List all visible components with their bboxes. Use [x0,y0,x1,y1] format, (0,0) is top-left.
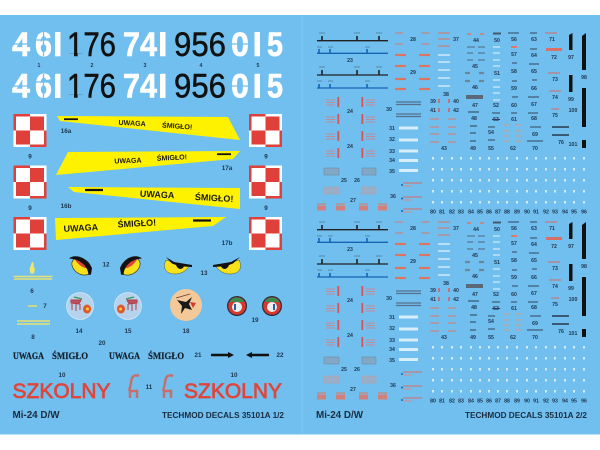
rotor stripes 23 [317,33,388,88]
arrows 21, 22: 22 [276,352,284,359]
items 44-49 [465,34,485,152]
yellow strip 17a: 17a [222,165,233,172]
serif stencils 20: UWAGA ŚMIGŁO: 20 [98,340,106,347]
yellow strip 16b: UWAGA [140,189,175,200]
number labels 80-96 lower: 81 [439,398,445,404]
items 63-70 lower: 67 [531,291,537,297]
items 56-62: 60 [511,103,517,109]
number labels 80-96 lower: 82 [449,398,455,404]
items 56-62 [504,33,521,152]
items 56-62: 56 [511,37,517,43]
number labels 80-96: 80 [430,210,436,216]
yellow strip 17b: ŚMIGŁO! [117,217,156,230]
items 56-62: 62 [510,146,516,152]
tactical numbers row 1: 1 [248,26,266,64]
items 44-49: 44 [473,38,479,44]
number labels 80-96: 89 [514,210,520,216]
items 71-76 lower: 73 [552,266,558,272]
items 39-43 lower [430,288,459,341]
items 6, 7, 8: small yellow stencils: 8 [31,334,35,341]
number labels 80-96 lower: 85 [477,398,483,404]
items 63-70 lower: 69 [532,321,538,327]
tactical numbers row 2: 5 [267,68,283,106]
items 63-70 lower: 63 [531,226,537,232]
items 50-55 lower: 55 [488,335,494,341]
footer title right sheet: Mi-24 D/W [316,410,364,421]
items 30-36 lower: 34 [389,347,395,353]
items 71-76 lower: 71 [549,226,555,232]
roundels: Polish checkerboard: 9 [264,205,268,212]
eyes 13: 13 [200,270,208,277]
items 63-70 lower: 65 [531,258,537,264]
black bars 97-101: 98 [581,75,587,81]
rotor stripes 23: 23 [347,58,353,64]
tactical numbers row 2 [12,74,282,98]
number labels 80-96: 84 [468,210,474,216]
items 71-76 [545,33,569,146]
tactical numbers row 2: 176 [67,68,116,106]
items 71-76 lower: 74 [552,284,558,290]
number labels 80-96 lower: 94 [562,398,568,404]
grey grids 25, 26 and pale red grids 27 lower: 27 [350,387,356,393]
serif stencils 20: UWAGA ŚMIGŁO: ŚMIGŁO [52,350,88,362]
arrows 21, 22: 21 [194,352,202,359]
items 56-62: 57 [511,52,517,58]
items 30-36 lower: 30 [386,296,392,302]
items 50-55 [488,34,501,152]
number labels 1-5: 2 [91,63,94,69]
items 63-70 lower: 64 [531,242,537,248]
badge 18: 18 [182,328,190,335]
items 39-43: 43 [441,146,447,152]
tactical numbers row 2: 1 [48,68,67,106]
number labels 1-5: 1 [38,63,41,69]
items 50-55: 51 [494,71,500,77]
tactical numbers row 1: 0 [231,26,249,64]
number labels 1-5: 3 [144,63,147,69]
hook markings 11 [129,375,173,398]
roundels: Polish checkerboard [14,114,282,250]
tactical numbers row 2: 74 [123,68,157,106]
items 44-49 lower: 44 [473,227,479,233]
items 71-76: 76 [558,140,564,146]
red dashes 28, 29 lower: 29 [410,259,416,265]
number labels 80-96: 85 [477,210,483,216]
tactical numbers row 2: 6 [35,68,52,106]
grey grids 25, 26 and pale red grids 27 lower: 26 [354,367,360,373]
tactical numbers row 1 [12,32,282,56]
items 50-55: 55 [488,146,494,152]
items 63-70: 67 [531,102,537,108]
items 44-49: 46 [472,85,478,91]
SZKOLNY markings 10 [12,372,282,403]
items 44-49 lower: 49 [470,335,476,341]
number labels 80-96: 87 [495,210,501,216]
number labels 80-96: 90 [524,210,530,216]
items 63-70: 69 [532,132,538,138]
white small numerals grid lower [433,346,584,392]
yellow strip 17b: UWAGA [63,222,99,234]
number labels 80-96: 92 [543,210,549,216]
items 30-36 lower: 35 [389,358,395,364]
items 30-36: 30 [386,107,392,113]
items 56-62: 61 [511,117,517,123]
number labels 80-96 lower: 90 [524,398,530,404]
items 63-70: 70 [532,146,538,152]
red markers 24: 24 [347,109,353,115]
items 30-36: 34 [389,158,395,164]
items 50-55 lower: 52 [493,292,499,298]
eyes 12: 12 [102,262,110,268]
number labels 80-96 lower: 88 [504,398,510,404]
items 50-55 lower [488,222,501,341]
yellow strip 16a: UWAGA [118,119,146,128]
items 30-36 lower: 32 [389,326,395,332]
items 30-36 lower: 31 [389,315,395,321]
number labels 1-5 [38,63,260,69]
tactical numbers row 1: 1 [153,26,172,64]
items 71-76: 73 [552,77,558,83]
red dashes 28, 29: 37 [453,37,459,43]
badge 15: 15 [124,328,132,335]
number labels 80-96 lower: 84 [468,398,474,404]
red dashes 28, 29 lower: 28 [410,226,416,232]
yellow strip 17a: UWAGA [114,157,142,165]
number labels 80-96 lower: 95 [571,398,577,404]
badges 19: 19 [251,317,259,324]
tactical numbers row 2: 4 [12,68,30,106]
items 56-62: 58 [511,69,517,75]
items 71-76 lower [545,222,569,335]
items 63-70: 66 [531,86,537,92]
tactical numbers row 2: 1 [153,68,172,106]
items 63-70: 65 [531,69,537,75]
white small numerals grid [433,157,584,204]
items 30-36: 35 [389,169,395,175]
yellow strip 17a: ŚMIGŁO! [156,152,187,163]
grey grids 25, 26 and pale red grids 27 lower [317,357,387,397]
items 6, 7, 8: small yellow stencils: 6 [30,288,34,295]
grey grids 25, 26 and pale red grids 27: 27 [350,198,356,204]
black bars 97-101 lower [568,222,587,337]
yellow strip 16a [57,116,240,140]
items 39-43: 39 [430,99,436,105]
yellow strip 16b: 16b [61,203,72,210]
red markers 24 lower: 24 [347,298,353,304]
items 50-55 lower: 54 [488,319,494,325]
number labels 80-96: 86 [486,210,492,216]
items 63-70: 68 [531,116,537,122]
number labels 80-96 lower: 93 [552,398,558,404]
items 71-76 lower: 72 [551,244,557,250]
tactical numbers row 1: 956 [174,26,226,64]
red markers 24 lower [326,286,375,347]
yellow strip 17b [55,217,233,247]
red markers 24: 24 [347,144,353,150]
items 30-36 lower: 36 [390,383,396,389]
red dashes 28, 29: 28 [410,37,416,43]
number labels 80-96 [430,210,587,216]
black bars 97-101 lower: 99 [568,286,574,292]
items 50-55: 52 [493,103,499,109]
items 71-76: 74 [552,95,558,101]
footer title left sheet: Mi-24 D/W [12,410,60,421]
number labels 80-96 lower [430,398,587,404]
yellow strip 16a: ŚMIGŁO! [162,120,193,132]
number labels 80-96: 81 [439,210,445,216]
items 56-62 lower: 58 [511,258,517,264]
tactical numbers row 1: 6 [35,26,52,64]
items 39-43 lower: 43 [441,335,447,341]
black bars 97-101: 100 [569,108,577,114]
number labels 80-96: 94 [562,210,568,216]
panel: sheet 2/2 upper stencil set [317,33,587,216]
red dashes 28, 29 [395,33,459,98]
panel: sheet 2/2 lower stencil set [317,222,587,404]
badge 14: 14 [75,328,83,335]
rotor stripes 23 lower [317,222,388,277]
items 6, 7, 8: small yellow stencils: 7 [43,303,47,310]
SZKOLNY markings 10: SZKOLNY [184,380,282,403]
items 56-62 lower: 56 [511,226,517,232]
black bars 97-101 [568,33,587,148]
yellow strip 16b [61,187,240,210]
items 39-43: 40 [453,99,459,105]
grey grids 25, 26 and pale red grids 27 [317,168,387,208]
serif stencils 20: UWAGA ŚMIGŁO: UWAGA [13,352,44,362]
items 56-62 lower: 60 [511,292,517,298]
items 63-70 lower: 70 [532,335,538,341]
black bars 97-101 lower: 101 [569,331,577,337]
SZKOLNY markings 10: 10 [58,372,66,379]
tactical numbers row 2: 956 [174,68,226,106]
items 56-62 lower: 57 [511,241,517,247]
items 63-70 [527,33,543,152]
items 44-49 lower: 45 [472,253,478,259]
items 44-49 lower: 48 [471,305,477,311]
items 56-62: 59 [511,86,517,92]
items 50-55: 53 [493,117,499,123]
items 56-62 lower [504,222,521,341]
items 30-36: 31 [389,126,395,132]
items 63-70 lower [527,222,543,341]
black bars 97-101: 101 [569,142,577,148]
roundels: Polish checkerboard: 9 [28,205,32,212]
grey grids 25, 26 and pale red grids 27: 25 [341,178,347,184]
number labels 80-96: 96 [581,210,587,216]
red dashes 28, 29 lower: 38 [443,281,449,287]
items 39-43 [430,99,459,152]
items 71-76: 75 [552,113,558,119]
tactical numbers row 2: 1 [248,68,266,106]
SZKOLNY markings 10: SZKOLNY [12,380,110,403]
roundels: Polish checkerboard: 9 [264,154,268,160]
red markers 24 lower: 24 [347,333,353,339]
tactical numbers row 1: 1 [48,26,67,64]
badge 14 [66,292,94,335]
items 44-49: 49 [470,146,476,152]
items 44-49 lower: 46 [472,274,478,280]
items 44-49: 47 [472,103,478,109]
items 39-43 lower: 41 [430,297,436,303]
tactical numbers row 1: 5 [267,26,283,64]
yellow strip 17a [56,151,240,175]
items 63-70 lower: 68 [531,305,537,311]
items 30-36: 33 [389,149,395,155]
number labels 80-96 lower: 86 [486,398,492,404]
tactical numbers row 1: 4 [12,26,30,64]
yellow strip 16a: 16a [61,128,72,135]
badges 19 [227,296,282,324]
number labels 80-96: 91 [533,210,539,216]
items 71-76: 71 [549,37,555,43]
tactical numbers row 2: 0 [231,68,249,106]
number labels 80-96 lower: 87 [495,398,501,404]
badge 15 [114,292,142,335]
footer code left sheet: TECHMOD DECALS 35101A 1/2 [162,410,284,420]
number labels 80-96 lower: 96 [581,398,587,404]
items 50-55: 54 [488,130,494,136]
rotor stripes 23 lower: 23 [347,247,353,253]
items 44-49 lower [465,223,485,341]
items 39-43 lower: 42 [453,297,459,303]
red markers 24 [326,97,375,158]
number labels 80-96: 82 [449,210,455,216]
items 44-49 lower: 47 [472,292,478,298]
tactical numbers row 1: 176 [67,26,116,64]
items 44-49: 45 [472,64,478,70]
number labels 1-5: 4 [200,63,203,69]
items 63-70 lower: 66 [531,275,537,281]
number labels 80-96 lower: 91 [533,398,539,404]
number labels 80-96 lower: 92 [543,398,549,404]
tactical numbers row 1: 74 [123,26,157,64]
number labels 80-96: 93 [552,210,558,216]
items 30-36 [386,102,422,212]
items 50-55 lower: 50 [494,227,500,233]
footer code right sheet: TECHMOD DECALS 35101A 2/2 [465,410,587,420]
items 50-55 lower: 53 [493,306,499,312]
number labels 1-5: 5 [257,63,260,69]
number labels 80-96 lower: 83 [458,398,464,404]
number labels 80-96: 95 [571,210,577,216]
number labels 80-96 lower: 80 [430,398,436,404]
items 6, 7, 8: small yellow stencils [14,262,52,341]
items 39-43 lower: 39 [430,288,436,294]
red dashes 28, 29: 38 [443,92,449,98]
items 71-76 lower: 75 [552,302,558,308]
black bars 97-101 lower: 98 [581,264,587,270]
black bars 97-101 lower: 100 [569,297,577,303]
serif stencils 20: UWAGA ŚMIGŁO: ŚMIGŁO [148,350,184,362]
serif stencils 20: UWAGA ŚMIGŁO: UWAGA [109,352,140,362]
number labels 80-96: 83 [458,210,464,216]
black bars 97-101: 97 [568,55,574,61]
red dashes 28, 29 lower: 37 [453,226,459,232]
black bars 97-101: 99 [568,97,574,103]
red dashes 28, 29 lower [395,222,459,287]
items 44-49: 48 [471,116,477,122]
items 63-70: 64 [531,53,537,59]
red dashes 28, 29: 29 [410,70,416,76]
roundels: Polish checkerboard: 9 [28,154,32,160]
hook markings 11: 11 [146,384,153,391]
items 56-62 lower: 61 [511,306,517,312]
number labels 80-96 lower: 89 [514,398,520,404]
grey grids 25, 26 and pale red grids 27: 26 [354,178,360,184]
items 71-76: 72 [551,55,557,61]
items 30-36: 36 [390,194,396,200]
items 50-55 lower: 51 [494,260,500,266]
panel: sheet 1/2 [12,26,284,421]
grey grids 25, 26 and pale red grids 27 lower: 25 [341,367,347,373]
items 30-36: 32 [389,137,395,143]
eyes 13 [164,257,241,277]
items 39-43: 41 [430,108,436,114]
items 56-62 lower: 59 [511,275,517,281]
items 71-76 lower: 76 [558,329,564,335]
serif stencils 20: UWAGA ŚMIGŁO [13,340,184,362]
badge 18 [170,289,202,335]
yellow strip 16b: ŚMIGŁO! [195,191,234,204]
SZKOLNY markings 10: 10 [230,372,238,379]
arrows 21, 22 [194,352,284,359]
eyes 12 [69,254,143,279]
items 30-36 lower: 33 [389,338,395,344]
items 63-70: 63 [531,37,537,43]
items 39-43: 42 [453,108,459,114]
number labels 80-96: 88 [504,210,510,216]
items 50-55: 50 [494,38,500,44]
yellow strip 17b: 17b [222,240,233,247]
black bars 97-101 lower: 97 [568,244,574,250]
items 56-62 lower: 62 [510,335,516,341]
items 39-43 lower: 40 [453,288,459,294]
items 30-36 lower [386,291,422,401]
